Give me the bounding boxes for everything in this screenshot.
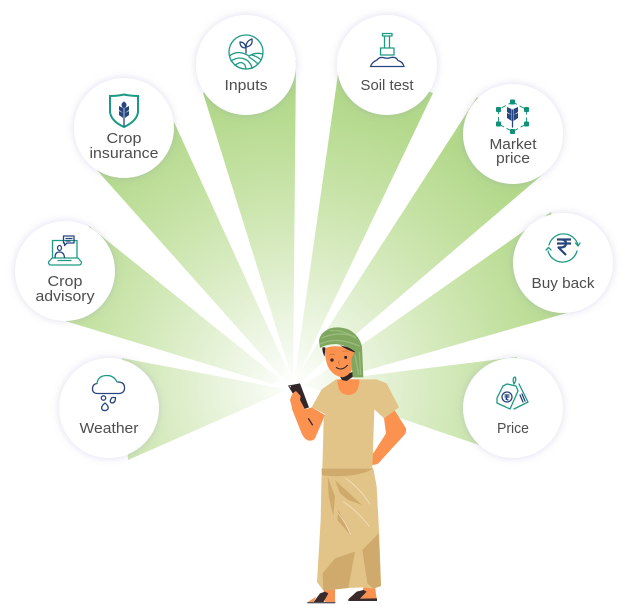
panel: crop advisory [15, 221, 115, 321]
head [319, 327, 363, 381]
label: price: Price [497, 420, 529, 437]
panel: price [463, 358, 563, 458]
label: weather: Weather [80, 420, 139, 437]
label: market price: price [496, 150, 530, 167]
icon: rupee with arrows [546, 234, 580, 262]
icon: rain cloud [92, 376, 125, 411]
ray: crop advisory [62, 226, 282, 384]
label: soil test: Soil test [360, 77, 414, 94]
left arm and hand on hip [361, 409, 406, 465]
panel: inputs [196, 15, 296, 115]
ray: inputs [203, 60, 296, 382]
label: inputs: Inputs [224, 77, 268, 94]
feet and sandals [307, 587, 377, 603]
icon: soil test shovel [370, 34, 404, 66]
lungi [317, 468, 381, 591]
icon: inputs field and sprout [229, 35, 263, 69]
farmer figure holding phone [288, 327, 406, 603]
panel: buy back [513, 213, 613, 313]
icon: wheat network [496, 100, 529, 134]
label: crop insurance: Crop [106, 130, 142, 147]
ray: soil test [294, 60, 433, 382]
label: crop advisory [36, 273, 95, 305]
label: market price: Market [490, 136, 537, 153]
light rays [62, 60, 567, 460]
label: crop insurance: insurance [90, 145, 158, 162]
ray: buy back [300, 212, 567, 388]
right arm and hand holding phone [288, 383, 325, 441]
label: crop insurance [90, 130, 158, 162]
ray: weather [122, 358, 287, 460]
icon: shield with wheat [110, 94, 138, 127]
panel: market price [463, 84, 563, 184]
panel: soil test [337, 15, 437, 115]
shirt [312, 379, 399, 468]
label: buy back: Buy back [532, 275, 595, 292]
ray: price [300, 357, 517, 458]
label: market price [490, 136, 537, 167]
panel: crop insurance [74, 78, 174, 178]
icon: laptop with advisor [48, 236, 82, 265]
ray: market price [293, 97, 549, 382]
panel: weather [59, 358, 159, 458]
label: crop advisory: Crop [48, 273, 82, 290]
turban [319, 327, 363, 377]
label: crop advisory: advisory [36, 288, 95, 305]
ray: crop insurance [95, 122, 293, 382]
phone [288, 383, 309, 410]
icon: price tags [497, 377, 528, 409]
